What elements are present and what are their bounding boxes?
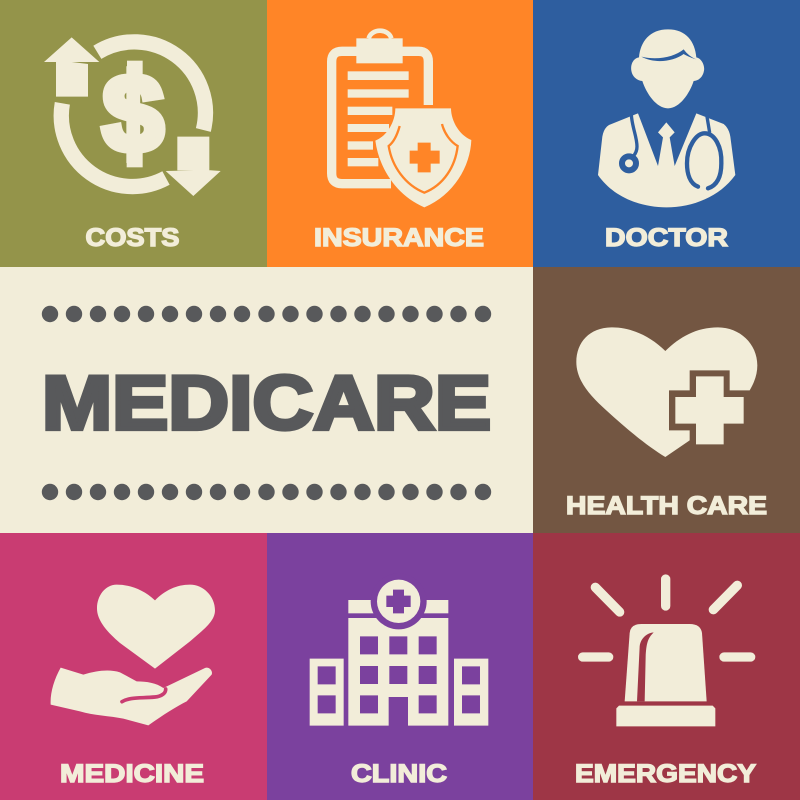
icon: dollar with cycling arrows: $ bbox=[103, 53, 163, 174]
icon: doctor with stethoscope bbox=[598, 29, 735, 207]
label: doctor: DOCTOR bbox=[605, 224, 728, 252]
label: health care: HEALTH CARE bbox=[566, 492, 767, 520]
label: emergency: EMERGENCY bbox=[575, 760, 756, 788]
top dotted row bbox=[42, 306, 491, 322]
bottom dotted row bbox=[42, 484, 491, 500]
icon: clipboard and shield bbox=[332, 31, 471, 207]
panel: insurance bbox=[267, 0, 533, 267]
panel: clinic bbox=[267, 533, 533, 800]
label: clinic: CLINIC bbox=[351, 760, 447, 788]
label: costs: COSTS bbox=[86, 224, 180, 252]
panel: emergency bbox=[533, 533, 800, 800]
icon: heart with cross bbox=[576, 327, 757, 457]
title: medicare: MEDICARE bbox=[42, 361, 491, 446]
icon: emergency siren bbox=[583, 579, 751, 726]
icon: hospital building bbox=[310, 573, 488, 726]
label: insurance: INSURANCE bbox=[314, 224, 484, 252]
panel: health care bbox=[533, 267, 800, 533]
icon: dollar with cycling arrows bbox=[44, 37, 221, 196]
panel: medicine bbox=[0, 533, 267, 800]
panel: medicare title bbox=[0, 267, 533, 533]
icon: hand holding heart bbox=[51, 585, 215, 725]
panel: doctor bbox=[533, 0, 800, 267]
label: medicine: MEDICINE bbox=[60, 760, 204, 788]
panel: costs bbox=[0, 0, 267, 267]
